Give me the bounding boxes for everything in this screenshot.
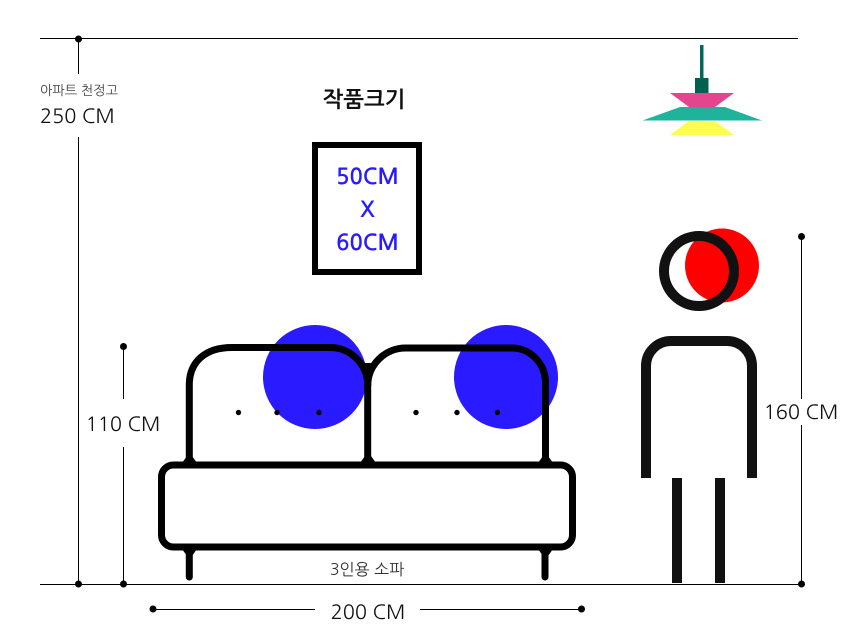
artwork frame: 60CM [336, 232, 399, 254]
person height measure: 160 CM [764, 402, 838, 422]
sofa height measure: 110 CM [86, 414, 160, 434]
sofa back cushions [189, 348, 546, 465]
artwork frame: 50CM [336, 166, 399, 188]
person height measure [764, 233, 838, 588]
sofa width measure [150, 602, 585, 622]
sofa width measure: 200 CM [331, 602, 405, 622]
legs [672, 478, 682, 583]
ceiling height measure: 250 CM [40, 106, 115, 126]
artwork title: 작품크기 [323, 88, 405, 111]
blue circle left [263, 325, 367, 429]
head ring [664, 236, 734, 306]
sofa joints [182, 363, 553, 556]
cushion dots [236, 410, 500, 415]
sofa legs [189, 550, 545, 577]
person figure [646, 228, 759, 583]
red circle [685, 228, 759, 302]
ceiling height measure: 아파트 천정고 [40, 84, 118, 97]
floor line [40, 584, 805, 586]
sofa [162, 325, 572, 577]
ceiling line [40, 38, 798, 40]
sofa seat [162, 465, 572, 547]
blue circle right [454, 325, 558, 429]
sofa height measure [86, 343, 160, 588]
ceiling height measure [40, 36, 118, 588]
pendant lamp [642, 45, 762, 135]
body [646, 341, 752, 478]
artwork frame [315, 145, 419, 272]
sofa label: 3인용 소파 [330, 561, 404, 578]
artwork frame: X [360, 199, 375, 221]
